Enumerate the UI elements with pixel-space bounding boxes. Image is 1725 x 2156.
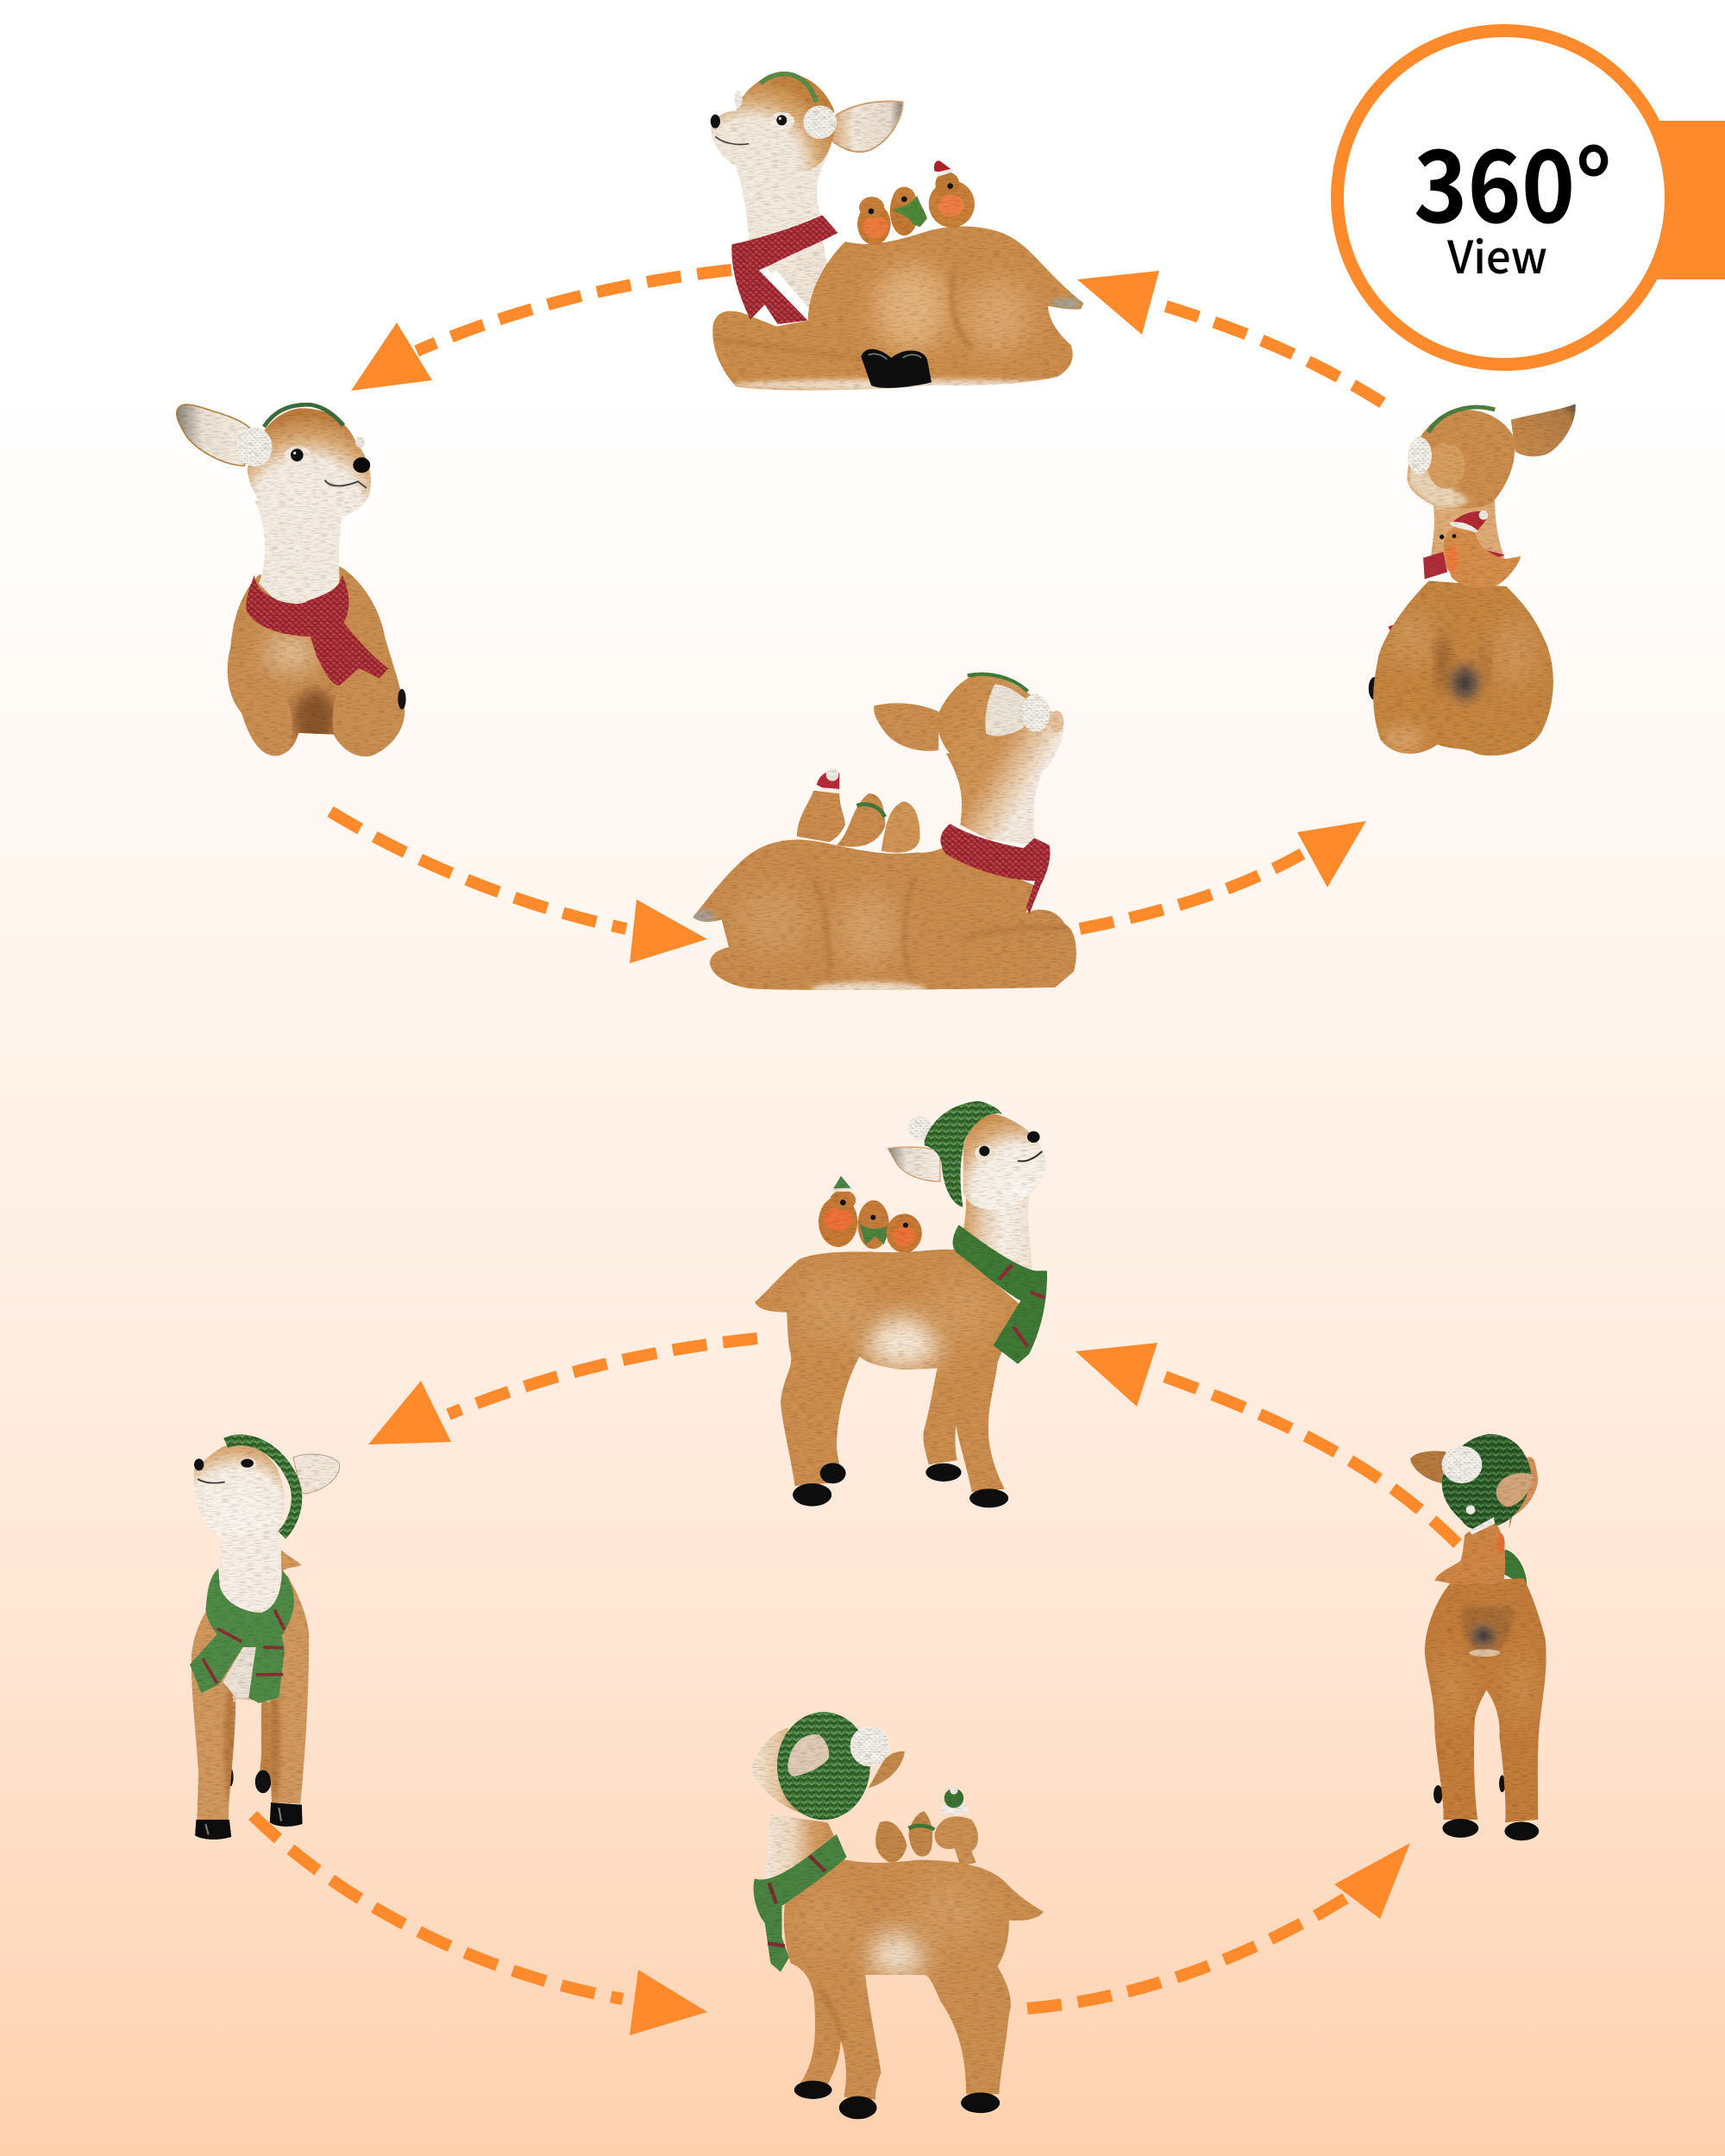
earmuff — [734, 74, 837, 139]
inner ear — [787, 1734, 829, 1777]
deer: green scarf, left profile standing — [752, 1712, 1044, 2119]
earmuff — [1408, 407, 1495, 474]
ear — [1410, 1451, 1446, 1483]
hooves — [861, 349, 932, 388]
ear — [874, 703, 938, 751]
inner ear — [1496, 1473, 1533, 1507]
beanie band — [226, 1440, 297, 1535]
hooves — [1442, 1819, 1539, 1840]
body — [712, 226, 1084, 392]
ear — [888, 1147, 940, 1181]
badge: 360 degree view — [1337, 31, 1725, 364]
far hooves — [1433, 1775, 1505, 1803]
scarf — [190, 1568, 294, 1703]
deer: red scarf, back view sitting — [1369, 404, 1576, 755]
body — [1373, 580, 1553, 755]
badge: 360 degree view: 360° — [1414, 107, 1612, 252]
ear — [177, 404, 250, 466]
body — [784, 1860, 1044, 2100]
bird with santa hat — [1440, 511, 1521, 587]
head — [194, 1444, 285, 1536]
hooves — [793, 1463, 1008, 1507]
arrow: centre deer to right deer — [1080, 821, 1366, 929]
beanie — [908, 1101, 1002, 1207]
neck — [960, 1193, 1032, 1270]
ear — [1511, 404, 1576, 456]
arrow: lower right deer to lower top deer — [1076, 1343, 1458, 1544]
head — [712, 73, 835, 175]
face — [285, 446, 370, 488]
ear — [293, 1454, 340, 1494]
scarf — [953, 1225, 1047, 1364]
hoof — [1369, 677, 1380, 700]
neck — [1430, 500, 1507, 563]
body — [1425, 1578, 1546, 1822]
birds — [875, 1786, 978, 1865]
head — [963, 1114, 1046, 1210]
head — [1408, 410, 1515, 509]
badge: 360 degree view: View — [1446, 222, 1547, 286]
deer: red scarf, left profile lying — [711, 73, 1084, 392]
pompom — [1442, 1446, 1482, 1483]
face — [711, 112, 794, 144]
scarf — [246, 575, 388, 686]
head edge — [1509, 1457, 1538, 1529]
head — [248, 408, 371, 520]
scarf piece — [1501, 1550, 1527, 1587]
arrow: top deer to left deer — [351, 270, 731, 391]
body — [191, 1576, 309, 1820]
face — [194, 1458, 256, 1483]
neck — [765, 1814, 845, 1906]
arrow: lower bottom deer to lower right deer — [1027, 1843, 1410, 2009]
scarf — [940, 824, 1051, 914]
deer: green scarf, right profile standing — [755, 1101, 1047, 1507]
arrow: left deer to centre deer — [330, 812, 707, 963]
arrow: right deer to top deer — [1077, 271, 1383, 403]
deer: red scarf, right profile lying — [687, 674, 1076, 996]
arrow: lower top deer to lower left deer — [368, 1338, 757, 1445]
body — [227, 567, 405, 761]
face — [975, 1131, 1042, 1162]
pompom — [850, 1727, 889, 1766]
neck — [735, 153, 830, 273]
head — [752, 1727, 805, 1814]
birds — [797, 768, 920, 853]
earmuff — [236, 404, 365, 467]
ear — [832, 101, 903, 152]
birds — [857, 160, 975, 245]
deer: green scarf, back view standing — [1410, 1434, 1546, 1840]
scarf — [754, 1834, 847, 1972]
hooves — [794, 2081, 1000, 2119]
body — [755, 1250, 1020, 1492]
far ear — [869, 1752, 905, 1788]
neck — [220, 1520, 282, 1613]
far legs and hooves — [228, 1699, 272, 1793]
deer: red scarf, front-left sitting — [177, 404, 406, 761]
beanie — [777, 1712, 870, 1820]
neck — [946, 753, 1050, 845]
head highlights — [1408, 442, 1469, 509]
arrow: lower left deer to lower bottom deer — [253, 1815, 707, 2035]
tail tip — [279, 1546, 301, 1572]
scarf pieces — [1388, 549, 1505, 634]
body — [687, 839, 1076, 996]
beanie — [1442, 1434, 1531, 1529]
hooves — [195, 1802, 303, 1839]
hoof — [398, 689, 406, 710]
birds — [819, 1175, 922, 1253]
head — [938, 674, 1063, 783]
deer: green scarf, front view standing — [190, 1440, 340, 1839]
chest — [765, 239, 828, 310]
scarf — [731, 215, 838, 324]
bird — [1434, 1505, 1505, 1584]
earmuff and inner ear — [968, 674, 1063, 736]
neck — [254, 500, 342, 605]
